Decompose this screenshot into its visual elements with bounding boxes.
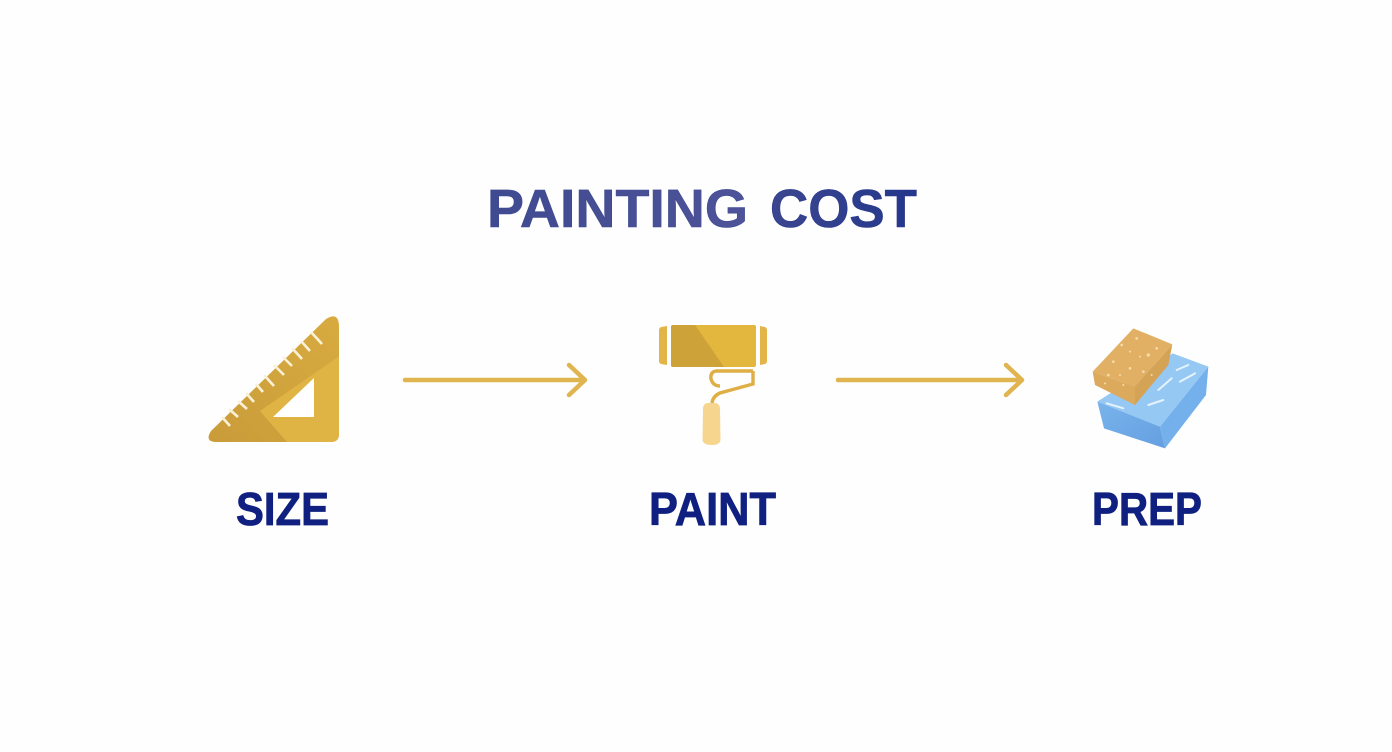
- step: size: [209, 316, 339, 535]
- step: prep: [1092, 328, 1208, 535]
- icon: set square ruler: [209, 316, 339, 442]
- arrow: paint to prep: [838, 365, 1022, 395]
- icon: paint roller: [659, 325, 767, 445]
- yellow sponge: [1093, 328, 1172, 405]
- icon: sponges: [1093, 328, 1208, 448]
- blue sponge: [1097, 353, 1208, 448]
- title: [487, 179, 917, 239]
- title: COST: [770, 179, 917, 239]
- step: paint: [649, 325, 776, 535]
- title: PAINTING: [487, 179, 748, 239]
- label: prep: PREP: [1092, 483, 1202, 535]
- label: size: SIZE: [236, 483, 329, 535]
- label: paint: PAINT: [649, 483, 776, 535]
- arrow: size to paint: [405, 365, 585, 395]
